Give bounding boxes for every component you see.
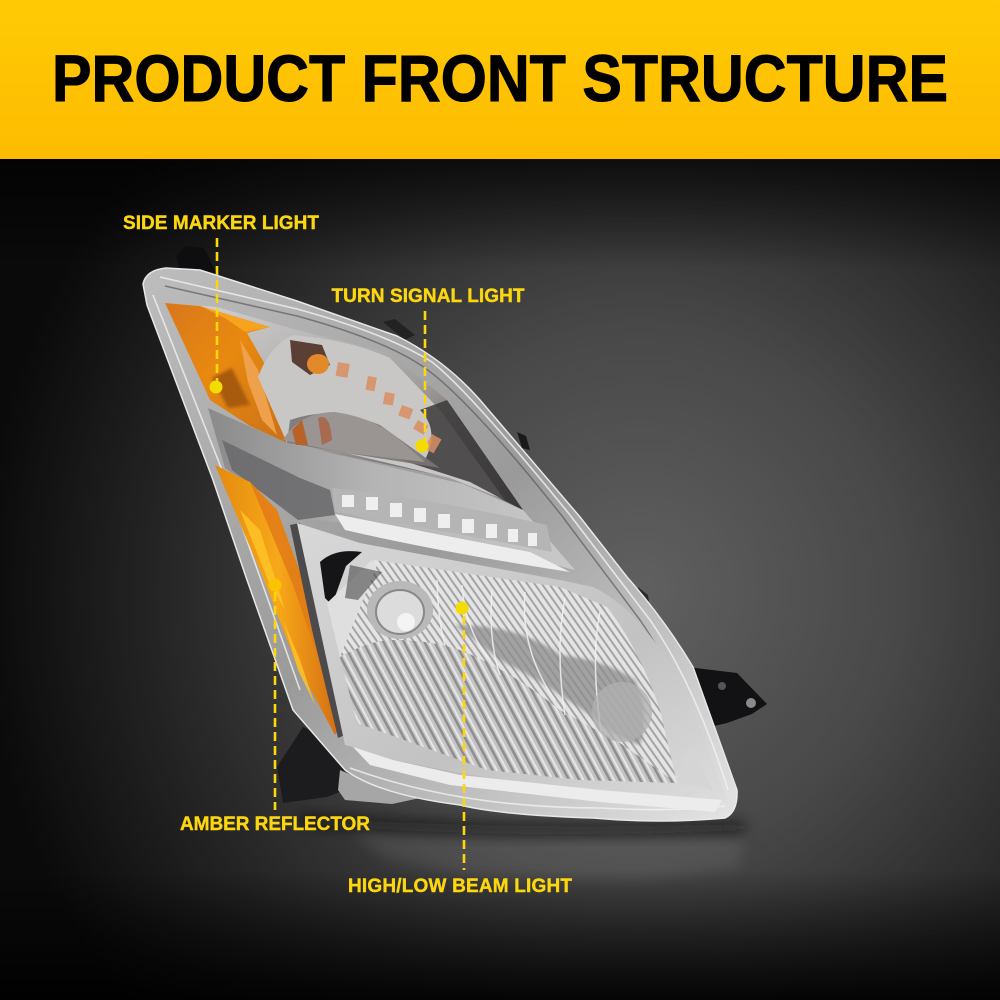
bulbs: [283, 340, 425, 462]
amber reflector lens: [215, 465, 342, 735]
projector bulb: [320, 551, 652, 742]
callout: turn signal light: TURN SIGNAL LIGHT: [332, 286, 525, 307]
reflector curved ribs: [437, 580, 602, 738]
callout: amber reflector: [180, 578, 370, 835]
lower lens lip: [353, 747, 722, 812]
dark reflection sweep: [455, 625, 644, 745]
white swoosh under LEDs: [335, 514, 570, 572]
callout: turn signal light: [332, 286, 525, 452]
turn signal reflector: [258, 335, 505, 500]
lower compartment: [297, 523, 727, 800]
darker reflector shading: [370, 400, 523, 510]
upper compartment: [165, 303, 523, 510]
housing outline: [143, 268, 737, 821]
title banner: [0, 0, 1000, 159]
second projector lobe: [592, 682, 652, 742]
lower ribbed reflector: [340, 640, 677, 783]
callout: amber reflector: AMBER REFLECTOR: [180, 814, 370, 835]
rim highlight lines: [153, 277, 728, 810]
side marker amber lens: [165, 303, 287, 443]
callout: high/low beam light: [348, 602, 572, 897]
middle chrome band with LEDs: [208, 408, 575, 570]
callout: side marker light: [123, 213, 319, 394]
LED strip: [332, 488, 552, 552]
mounting brackets: [176, 246, 767, 804]
callout: high/low beam light: HIGH/LOW BEAM LIGHT: [348, 876, 572, 897]
amber facets: [200, 306, 277, 435]
dark strip beside amber: [290, 523, 345, 738]
headlight reflection: [300, 815, 745, 880]
callout: side marker light: SIDE MARKER LIGHT: [123, 213, 319, 234]
upper ribbed reflector: [327, 560, 677, 783]
headlight illustration: [143, 246, 767, 821]
turn signal facets: [336, 362, 442, 453]
